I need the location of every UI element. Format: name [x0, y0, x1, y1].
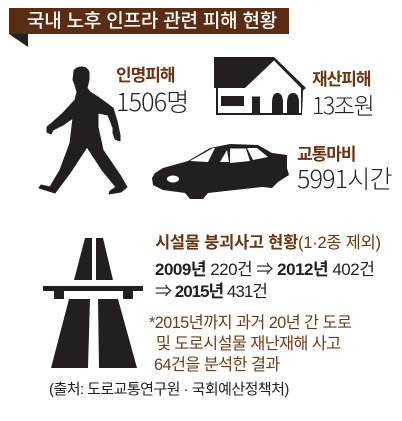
- stat: property damage: 13조원: [312, 87, 373, 121]
- note: *2015년까지 과거 20년 간 도로: [149, 314, 351, 332]
- note: 및 도로시설물 재난재해 사고: [156, 335, 341, 353]
- source: (출처: 도로교통연구원 · 국회예산정책처): [49, 381, 289, 398]
- stat: traffic paralysis: 교통마비: [297, 145, 356, 164]
- text: yearly counts: ⇒ 2015년 431건: [155, 282, 267, 301]
- stat: casualties: 인명피해: [116, 66, 175, 85]
- stat: casualties: [116, 66, 189, 119]
- title banner shape: [9, 8, 289, 47]
- stat: traffic paralysis: 5991시간: [297, 160, 392, 196]
- note: 64건을 분석한 결과: [154, 356, 280, 374]
- note: [149, 314, 352, 374]
- icon: walking person: [39, 67, 127, 194]
- stat: property damage: 재산피해: [312, 70, 371, 89]
- text: yearly counts: 2009년 220건 ⇒ 2012년 402건: [155, 260, 374, 279]
- icon: highway: [43, 238, 143, 368]
- text: yearly counts: [155, 260, 374, 301]
- stat: property damage: [312, 70, 373, 121]
- icon: car: [152, 144, 289, 199]
- heading: facility collapse: 시설물 붕괴사고 현황(1·2종 제외): [155, 234, 381, 252]
- title: 국내 노후 인프라 관련 피해 현황: [27, 11, 277, 32]
- stat: casualties: 1506명: [116, 83, 189, 119]
- icon: house: [214, 57, 306, 115]
